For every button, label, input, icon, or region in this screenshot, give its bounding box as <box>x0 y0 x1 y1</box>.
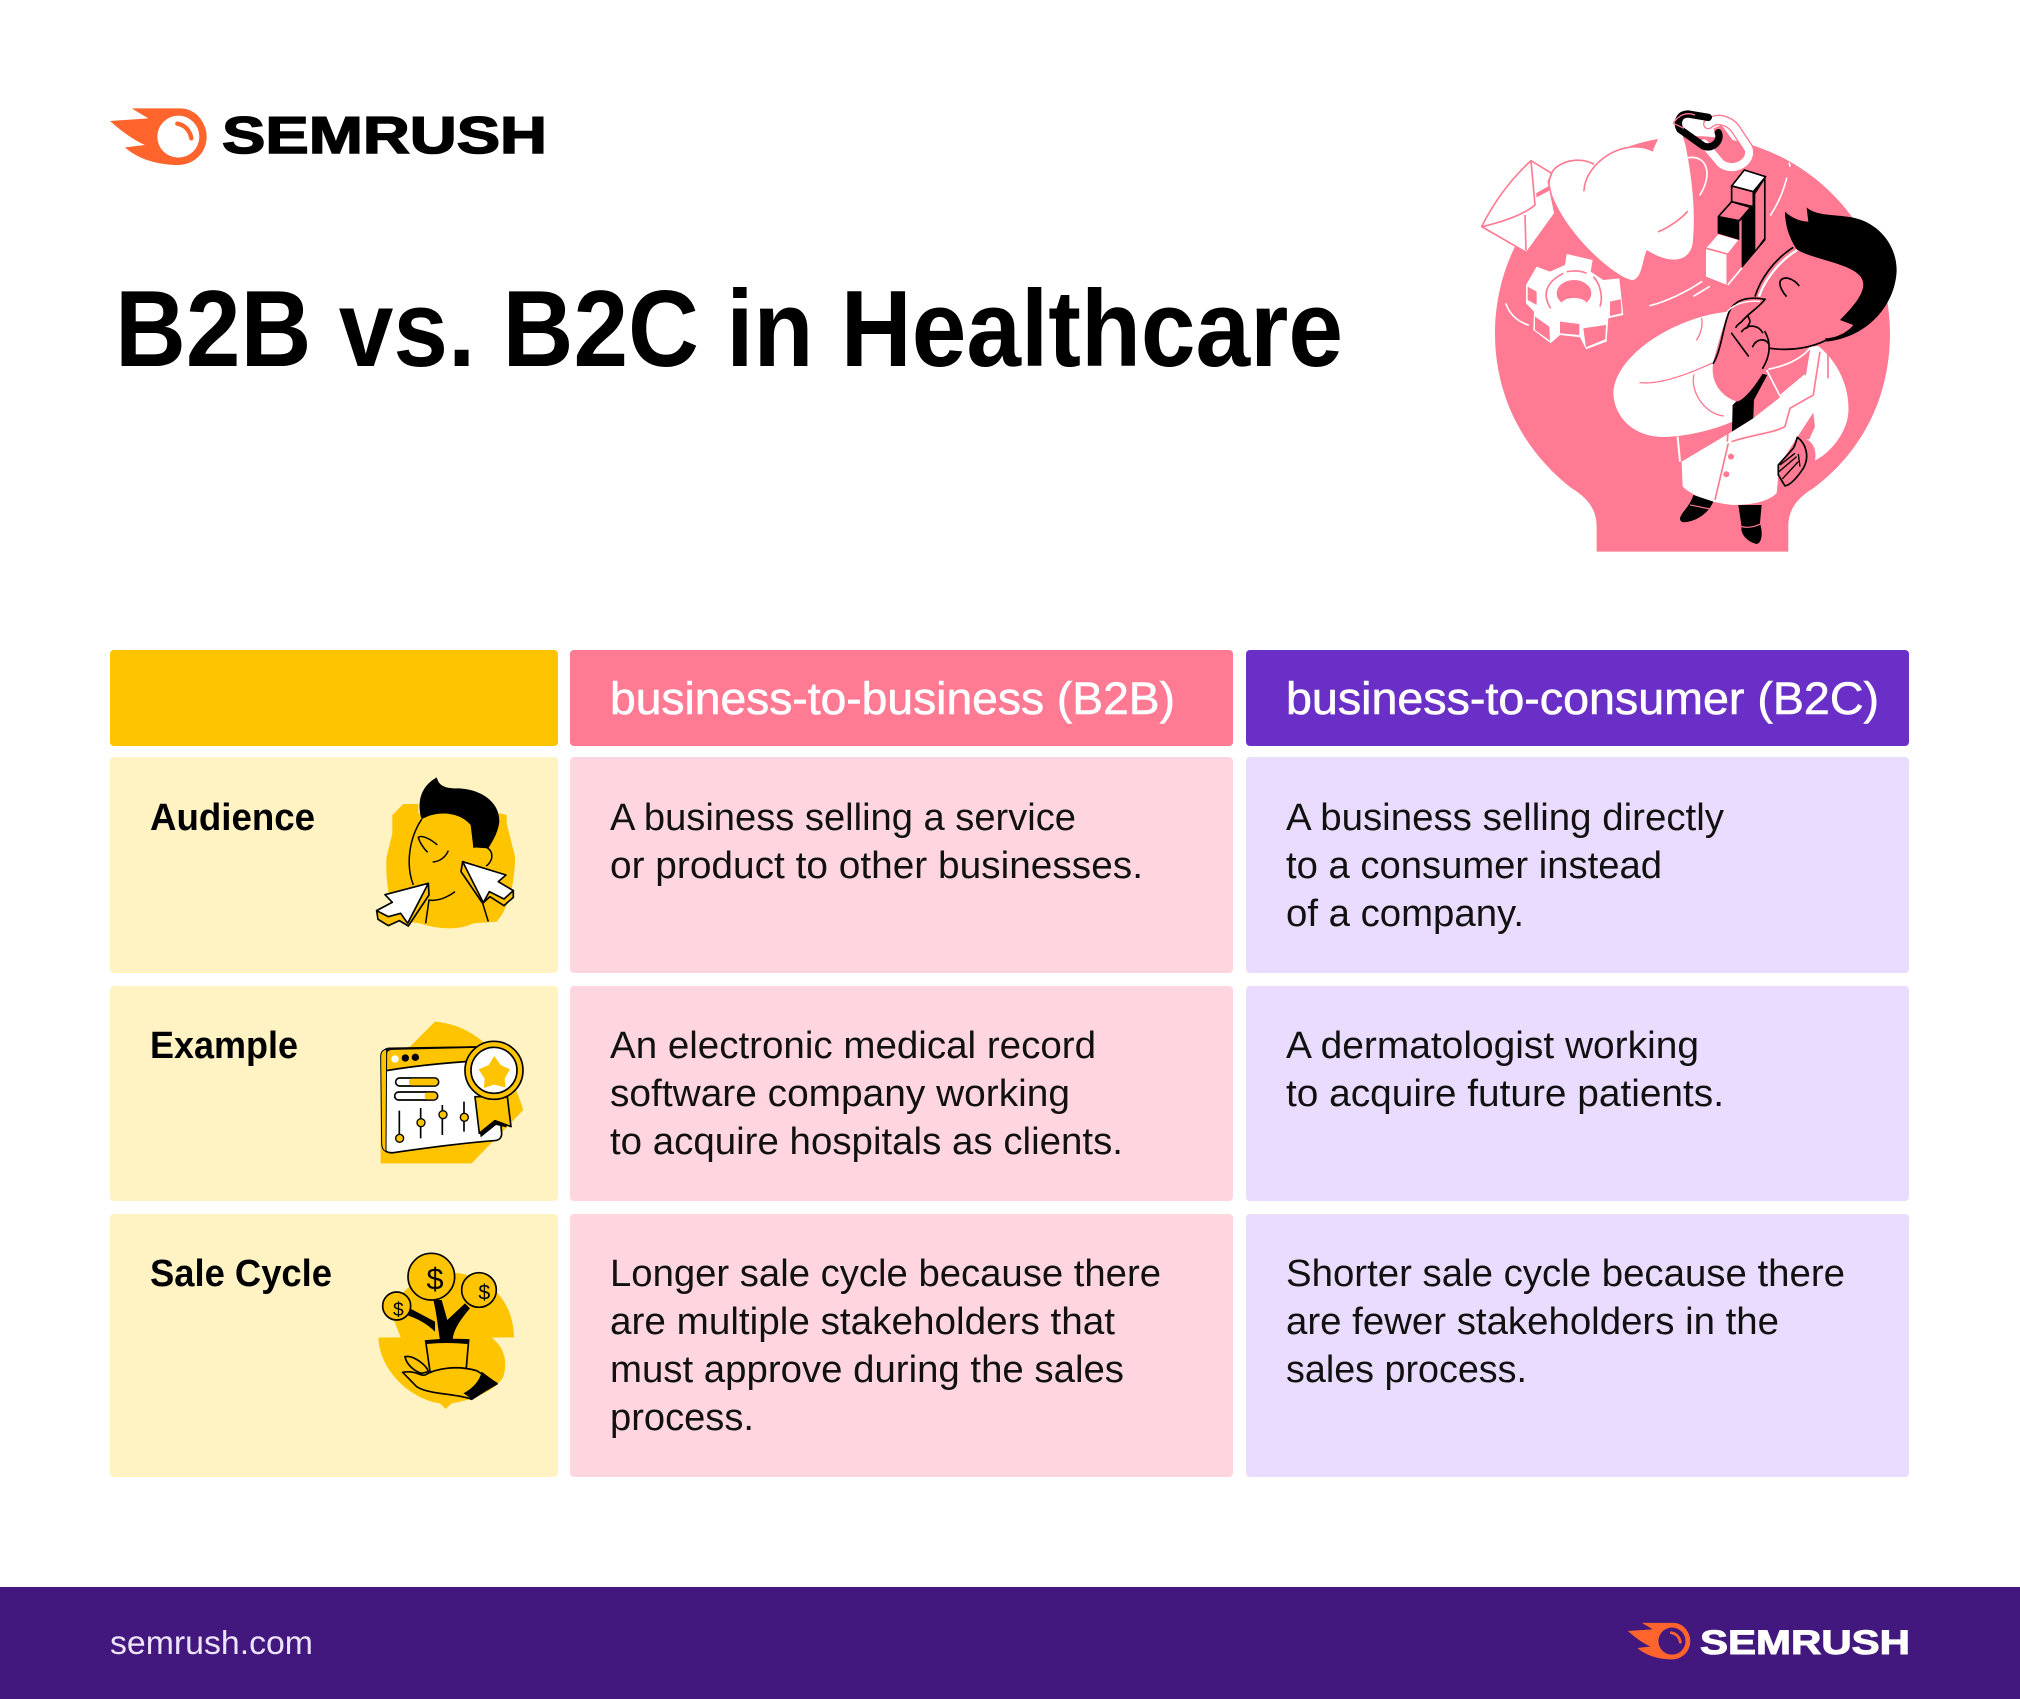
pink blob background <box>1495 136 1890 552</box>
doctor face lines <box>1755 247 1827 349</box>
doctor coat <box>1682 346 1848 505</box>
Audience B2B cell <box>570 757 1233 973</box>
logo: Semrush header <box>110 107 547 165</box>
title: B2B vs. B2C in Healthcare <box>115 268 1343 390</box>
icon: Semrush flame <box>110 108 207 165</box>
icon: money plant in hand <box>378 1253 514 1409</box>
icon: envelope <box>1482 161 1555 253</box>
Example B2B cell: software company working <box>610 1073 1070 1115</box>
doctor tie <box>1732 373 1767 432</box>
Example B2C cell: to acquire future patients. <box>1286 1073 1724 1115</box>
Sale Cycle label cell: Sale Cycle <box>150 1253 332 1295</box>
Example B2B cell: to acquire hospitals as clients. <box>610 1121 1123 1163</box>
Audience B2C cell: A business selling directly <box>1286 797 1724 839</box>
row: Audience <box>110 757 1909 973</box>
doctor figure <box>1613 207 1897 544</box>
footer wordmark: SEMRUSH <box>1700 1624 1910 1662</box>
Example B2C cell <box>1246 986 1909 1201</box>
Audience B2C cell: to a consumer instead <box>1286 845 1662 887</box>
Audience B2C cell <box>1246 757 1909 973</box>
logo wordmark: SEMRUSH <box>222 107 547 165</box>
Example B2B cell <box>570 986 1233 1201</box>
illustration: doctor thinking <box>1482 107 1897 552</box>
footer bar <box>0 1587 2020 1699</box>
Sale Cycle B2B cell: must approve during the sales <box>610 1349 1124 1391</box>
Example B2B cell: An electronic medical record <box>610 1025 1096 1067</box>
Sale Cycle B2C cell: are fewer stakeholders in the <box>1286 1301 1779 1343</box>
header: empty yellow cell <box>110 650 558 746</box>
header: B2B: business-to-business (B2B) <box>610 673 1175 724</box>
header row <box>110 650 1909 746</box>
row: Sale Cycle <box>110 1214 1909 1477</box>
Sale Cycle B2C cell: sales process. <box>1286 1349 1527 1391</box>
Sale Cycle B2B cell <box>570 1214 1233 1477</box>
Example label cell <box>110 986 558 1201</box>
footer url: semrush.com <box>110 1624 313 1661</box>
table <box>110 650 1909 1477</box>
icon: browser window with award ribbon <box>381 1022 523 1163</box>
Sale Cycle B2C cell: Shorter sale cycle because there <box>1286 1253 1845 1295</box>
icon: gear <box>1526 254 1623 349</box>
Audience B2B cell: A business selling a service <box>610 797 1076 839</box>
Sale Cycle B2B cell: process. <box>610 1397 754 1439</box>
Audience B2C cell: of a company. <box>1286 893 1524 935</box>
icon: heart <box>1548 107 1707 280</box>
icon: chain link <box>1673 114 1749 167</box>
icon: money plant in hand: $ <box>393 1300 404 1321</box>
Sale Cycle B2B cell: are multiple stakeholders that <box>610 1301 1115 1343</box>
icon: bar chart blocks <box>1506 163 1790 325</box>
doctor hand at hip <box>1778 437 1807 486</box>
Audience label cell <box>110 757 558 973</box>
Sale Cycle label cell <box>110 1214 558 1477</box>
icon: money plant in hand: $ <box>426 1262 444 1296</box>
Example label cell: Example <box>150 1025 298 1067</box>
icon: footer flame <box>1628 1623 1690 1659</box>
Audience label cell: Audience <box>150 797 315 839</box>
Sale Cycle B2B cell: Longer sale cycle because there <box>610 1253 1161 1295</box>
icon: money plant in hand: $ <box>478 1280 490 1304</box>
Audience B2B cell: or product to other businesses. <box>610 845 1143 887</box>
header: B2C: business-to-consumer (B2C) <box>1286 673 1879 724</box>
doctor sleeve <box>1613 312 1737 437</box>
Sale Cycle B2C cell <box>1246 1214 1909 1477</box>
footer logo <box>1628 1623 1910 1662</box>
Example B2C cell: A dermatologist working <box>1286 1025 1699 1067</box>
row: Example <box>110 986 1909 1201</box>
header: B2C <box>1246 650 1909 746</box>
header: B2B <box>570 650 1233 746</box>
doctor hand at chin <box>1713 298 1769 402</box>
icon: person with cursors <box>377 777 515 928</box>
footer <box>0 1587 2020 1699</box>
doctor hair <box>1785 207 1897 342</box>
doctor legs and shoes <box>1680 495 1713 522</box>
